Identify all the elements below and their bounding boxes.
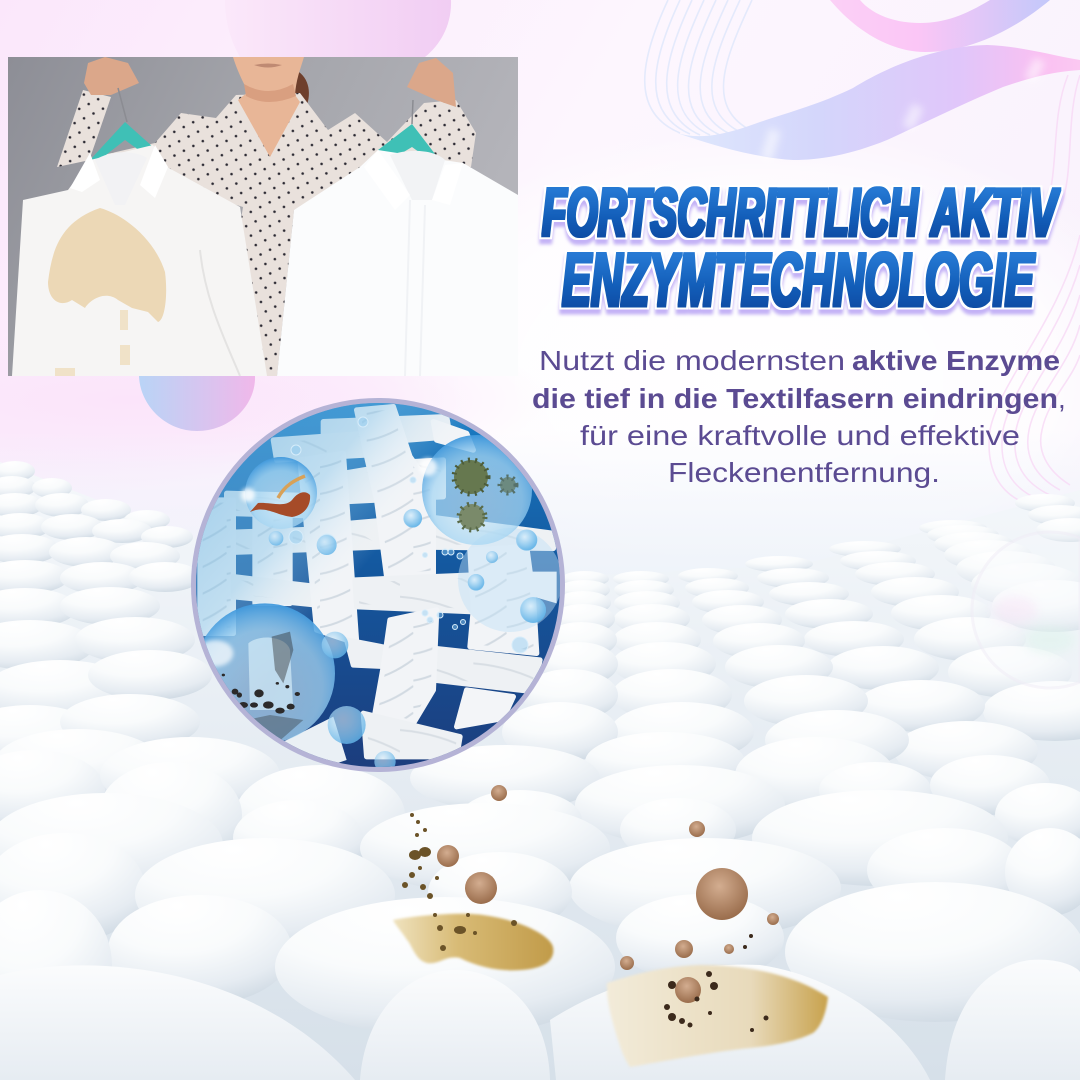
woman: hair [295, 72, 309, 103]
right clean shirt [277, 150, 518, 376]
magnified fibre lens [190, 395, 570, 780]
tiny bubbles [289, 417, 528, 653]
bubble: stain [241, 457, 317, 529]
description text: Fleckenentfernung. [668, 457, 940, 488]
bubble: green bacteria [419, 435, 532, 545]
left far rows [0, 461, 212, 765]
hanger wires [118, 88, 413, 124]
woman: face and neck [233, 57, 304, 157]
lips and chin shadow [244, 64, 296, 102]
woven fibres [200, 407, 557, 780]
stain: left dome [393, 914, 553, 970]
tan stain [48, 208, 166, 322]
blue tint [196, 403, 466, 688]
title [542, 174, 1060, 323]
left stained shirt [12, 145, 267, 376]
light haze right [458, 528, 562, 632]
hands [84, 57, 139, 95]
description text [532, 345, 1066, 488]
iridescent soap bubble [972, 532, 1080, 688]
left hanger [92, 122, 152, 160]
description text: für eine kraftvolle und effektive [580, 420, 1020, 451]
right converging columns [502, 494, 1080, 781]
small stain patches [55, 310, 130, 376]
decorative orb: top [225, 0, 451, 57]
fibre-area droplets [404, 509, 546, 623]
decorative ribbon waves [645, 0, 1080, 505]
small lens bubbles [269, 509, 546, 772]
right hanger [378, 124, 436, 154]
description text: aktive Enzyme [852, 345, 1060, 376]
photo: stained versus clean shirts [8, 57, 518, 376]
dirt droplets and particles [402, 785, 779, 1032]
decorative orb: lower [139, 376, 255, 431]
stain: right dome [607, 965, 828, 1067]
bubble: black dirt [204, 603, 348, 741]
description text: die tief in die Textilfasern eindringen [532, 383, 1058, 414]
fabric: quilted white domes [0, 461, 1080, 1080]
foreground domes [0, 729, 1080, 1080]
lens backdrop [190, 395, 570, 775]
polka-dot blouse [57, 90, 476, 376]
description text: , [1058, 383, 1066, 414]
description text: Nutzt die modernsten [539, 345, 845, 376]
